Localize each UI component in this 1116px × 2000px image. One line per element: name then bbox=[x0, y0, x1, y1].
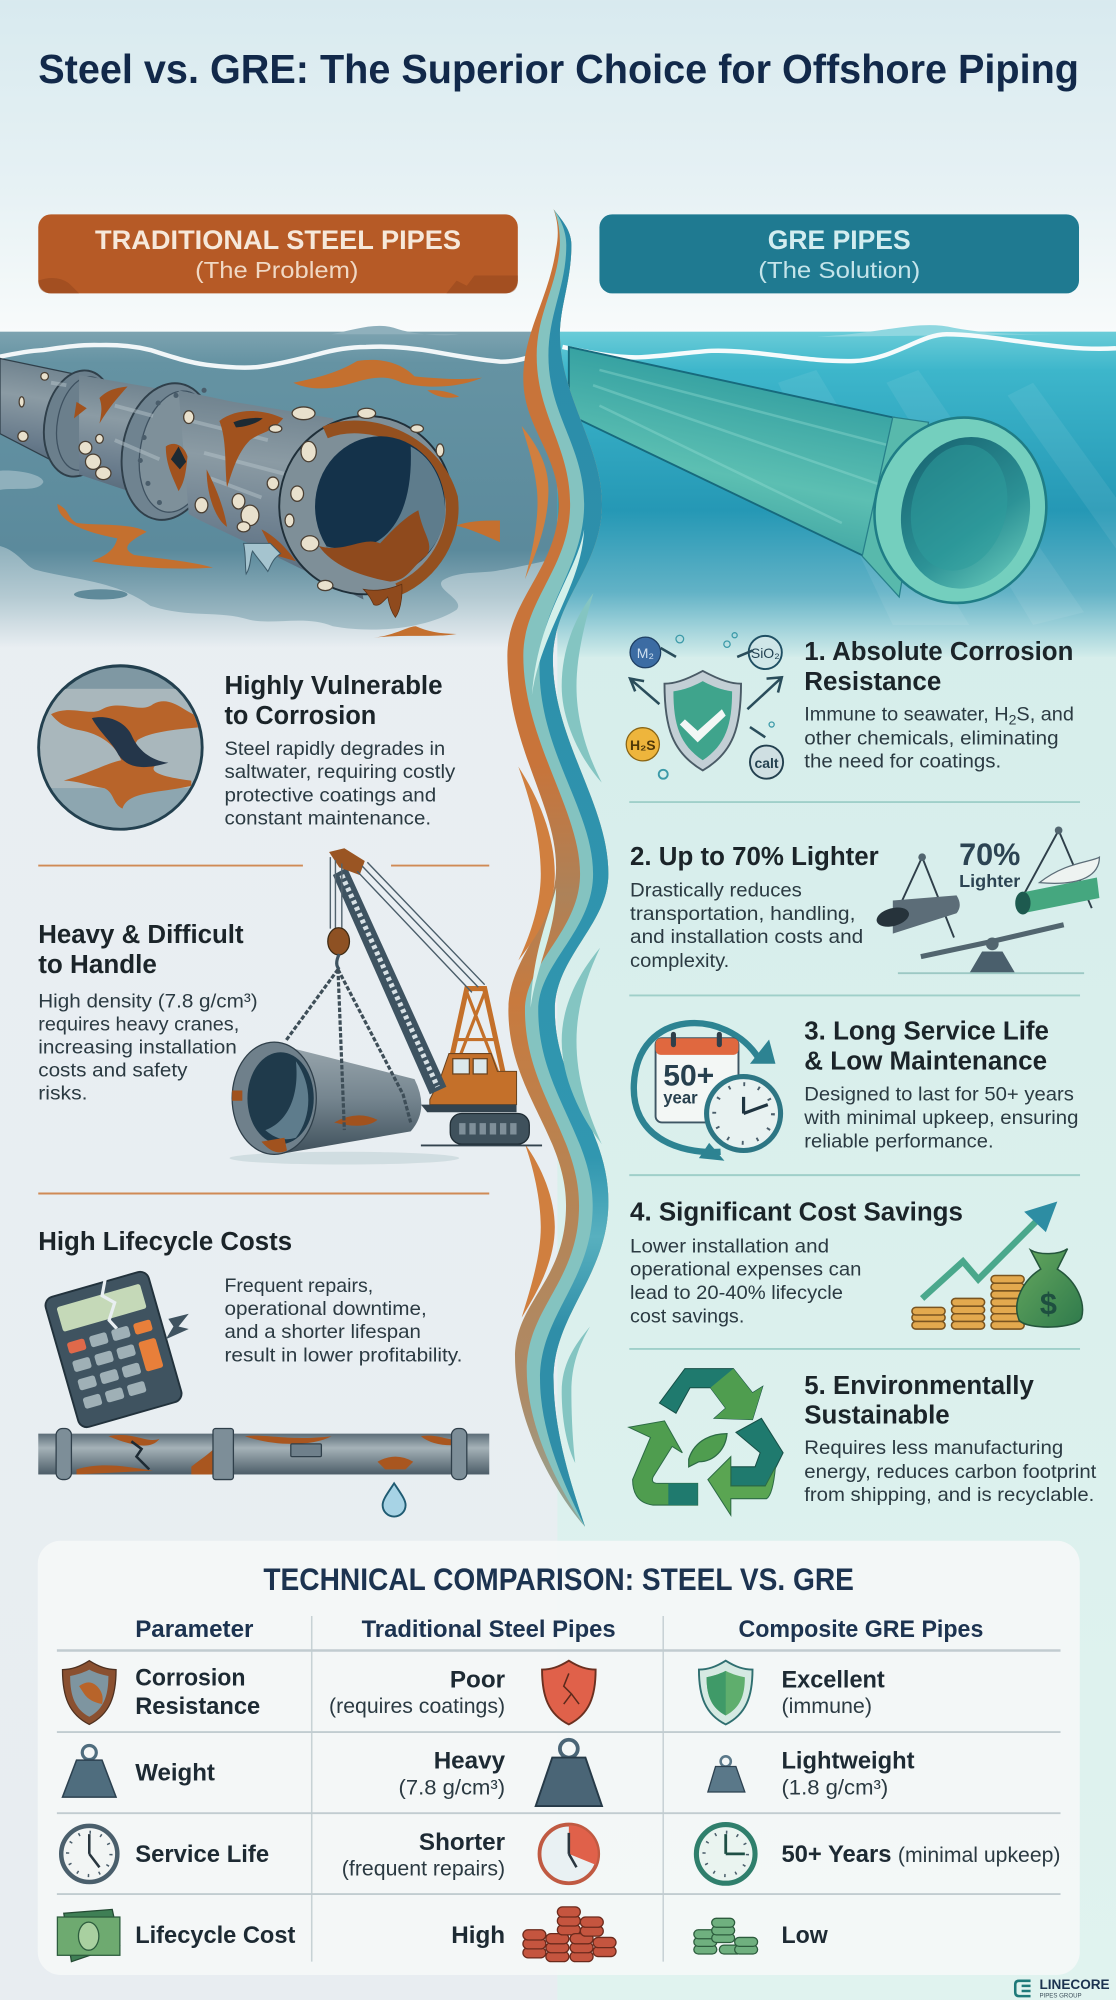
illustration: GRE pipe bbox=[569, 347, 1066, 621]
benefit 1 text: Immune to seawater, H bbox=[804, 704, 1007, 726]
table header: Composite GRE Pipes bbox=[738, 1616, 983, 1643]
row: corrosion resistance: (requires coatings) bbox=[329, 1695, 505, 1718]
benefit 3 text: with minimal upkeep, ensuring bbox=[803, 1107, 1079, 1129]
icon: balance scale: Lighter bbox=[959, 871, 1020, 891]
heading: heavy: to Handle bbox=[38, 951, 157, 979]
icon: heavy weight bbox=[536, 1740, 602, 1806]
barnacles bbox=[18, 372, 444, 591]
text: heavy: risks. bbox=[38, 1083, 87, 1105]
lifting chains bbox=[286, 969, 411, 1130]
text: corrosion: protective coatings and bbox=[224, 785, 436, 807]
icon: shield with molecules: H₂S bbox=[630, 737, 656, 753]
icon: red coin stacks bbox=[523, 1907, 616, 1962]
icon: calendar and clock: 50+ bbox=[663, 1059, 714, 1092]
illustration: crane lifting pipe bbox=[230, 848, 542, 1165]
water drips bbox=[244, 543, 281, 574]
rust patches on pipe bbox=[74, 387, 353, 561]
heading: corrosion: Highly Vulnerable bbox=[224, 672, 443, 700]
row: corrosion resistance: (immune) bbox=[781, 1695, 872, 1718]
benefit 4 text bbox=[630, 1198, 963, 1327]
row: weight: Lightweight bbox=[781, 1748, 914, 1775]
benefit 1 text: S, and bbox=[1016, 704, 1074, 726]
benefit 5 text: Sustainable bbox=[804, 1401, 950, 1429]
icon: recycling arrows with leaf bbox=[629, 1369, 783, 1515]
icon: balance scale: 70% bbox=[959, 836, 1020, 872]
table header: Traditional Steel Pipes bbox=[362, 1616, 616, 1643]
benefit 4 text: cost savings. bbox=[630, 1305, 744, 1327]
benefit 5 text: Requires less manufacturing bbox=[804, 1437, 1063, 1459]
icon: balance scale bbox=[874, 827, 1099, 973]
heading: corrosion: to Corrosion bbox=[224, 702, 376, 730]
lifted pipe bbox=[232, 1042, 421, 1154]
text: corrosion: Steel rapidly degrades in bbox=[224, 738, 445, 760]
row: service life: (frequent repairs) bbox=[342, 1858, 505, 1881]
ribbon: teal side blades bbox=[562, 593, 602, 1463]
benefit 5 text: 5. Environmentally bbox=[804, 1372, 1035, 1400]
icon: broken calculator bbox=[43, 1267, 184, 1429]
row: weight: (1.8 g/cm³) bbox=[781, 1777, 888, 1800]
panel: GRE benefits bbox=[626, 633, 1099, 1515]
text: heavy: requires heavy cranes, bbox=[38, 1013, 239, 1035]
benefit 1 text: the need for coatings. bbox=[804, 751, 1001, 773]
text: corrosion: constant maintenance. bbox=[224, 808, 431, 830]
row: weight bbox=[62, 1740, 914, 1806]
row: corrosion resistance: Corrosion bbox=[135, 1665, 246, 1692]
benefit 5 text: energy, reduces carbon footprint bbox=[804, 1461, 1097, 1483]
text: lifecycle costs: operational downtime, bbox=[224, 1298, 427, 1320]
benefit 2 text: transportation, handling, bbox=[630, 903, 855, 925]
benefit 4 text: Lower installation and bbox=[630, 1235, 829, 1257]
row: service life: Shorter bbox=[419, 1829, 506, 1856]
benefit 4 text: operational expenses can bbox=[630, 1258, 861, 1280]
logo: Linecore Pipes Group: PIPES GROUP bbox=[1039, 1992, 1082, 1999]
ribbon: orange band bbox=[507, 209, 608, 1527]
illustration: corroded steel pipe bbox=[0, 358, 467, 617]
table header: Parameter bbox=[135, 1616, 254, 1643]
central wave ribbon divider bbox=[507, 209, 608, 1527]
ribbon: orange side blades bbox=[518, 426, 555, 1318]
icon: growth arrow, coins and money bag bbox=[912, 1202, 1083, 1329]
flange 1 bbox=[36, 365, 122, 482]
crane boom bbox=[328, 848, 485, 1094]
banner: traditional steel pipes: TRADITIONAL STEEL PIPES bbox=[95, 225, 461, 255]
row: lifecycle cost: Low bbox=[781, 1922, 828, 1949]
text: heavy: increasing installation bbox=[38, 1037, 237, 1059]
table header bbox=[135, 1616, 983, 1643]
text: lifecycle costs: and a shorter lifespan bbox=[224, 1321, 421, 1343]
banner: traditional steel pipes: (The Problem) bbox=[195, 257, 358, 283]
water: clean side bbox=[557, 325, 1116, 657]
icon: calendar and clock bbox=[634, 1023, 781, 1161]
benefit 5 text bbox=[804, 1372, 1097, 1506]
panel: technical comparison table bbox=[38, 1541, 1080, 1975]
water: corroded side bbox=[0, 326, 557, 648]
icon: shield with molecules bbox=[626, 633, 783, 779]
benefit 3 text: reliable performance. bbox=[804, 1130, 994, 1152]
text: lifecycle costs bbox=[224, 1275, 462, 1366]
icon: clock bbox=[61, 1826, 117, 1882]
row: service life bbox=[61, 1825, 1061, 1883]
benefit 3 text: Designed to last for 50+ years bbox=[804, 1083, 1074, 1105]
banner: traditional steel pipes bbox=[38, 214, 518, 293]
banner: GRE pipes bbox=[599, 214, 1079, 293]
icon: shield with molecules: M₂ bbox=[637, 645, 654, 661]
row: service life: 50+ Years bbox=[781, 1841, 892, 1868]
icon: banknotes bbox=[57, 1909, 120, 1962]
panel: steel problems bbox=[38, 666, 542, 1517]
benefit 1 text: other chemicals, eliminating bbox=[804, 728, 1059, 750]
table title: TECHNICAL COMPARISON: STEEL VS. GRE bbox=[263, 1561, 854, 1597]
row: weight: Heavy bbox=[434, 1748, 506, 1775]
crane body bbox=[421, 989, 542, 1145]
logo: Linecore Pipes Group: LINECORE bbox=[1039, 1977, 1110, 1992]
row: service life: (minimal upkeep) bbox=[898, 1844, 1061, 1867]
pipe opening bbox=[265, 402, 467, 617]
row: lifecycle cost: High bbox=[451, 1922, 505, 1949]
icon: calendar and clock: year bbox=[663, 1087, 698, 1107]
icon: red clock bbox=[540, 1825, 598, 1883]
icon: corrosion close-up bbox=[38, 666, 204, 832]
text: lifecycle costs: result in lower profitability. bbox=[224, 1344, 462, 1366]
heading: lifecycle costs: High Lifecycle Costs bbox=[38, 1228, 292, 1256]
heading: heavy bbox=[38, 921, 244, 979]
benefit 1 text: 2 bbox=[1009, 712, 1017, 728]
benefit 4 text: 4. Significant Cost Savings bbox=[630, 1198, 963, 1226]
row: corrosion resistance bbox=[62, 1661, 885, 1724]
benefit 1 text: Resistance bbox=[804, 668, 941, 696]
icon: light weight bbox=[708, 1756, 745, 1792]
benefit 4 text: lead to 20-40% lifecycle bbox=[630, 1282, 843, 1304]
text: lifecycle costs: Frequent repairs, bbox=[224, 1275, 373, 1297]
icon: shield with molecules: SiO₂ bbox=[751, 645, 780, 661]
benefit 1 text bbox=[804, 638, 1074, 773]
benefit 2 text: and installation costs and bbox=[630, 926, 863, 948]
text: corrosion bbox=[224, 738, 455, 830]
benefit 2 text: 2. Up to 70% Lighter bbox=[630, 843, 879, 871]
row: lifecycle cost bbox=[57, 1907, 828, 1962]
illustration: leaking corroded pipe bbox=[38, 1429, 489, 1517]
benefit 3 text bbox=[803, 1018, 1079, 1152]
pipe collar bbox=[862, 417, 929, 597]
text: heavy: costs and safety bbox=[38, 1060, 188, 1082]
benefit 2 text: complexity. bbox=[630, 950, 729, 972]
benefit 5 text: from shipping, and is recyclable. bbox=[804, 1484, 1094, 1506]
heading: heavy: Heavy & Difficult bbox=[38, 921, 244, 949]
icon: cracked red shield bbox=[542, 1661, 596, 1724]
benefit 2 text bbox=[630, 843, 879, 972]
flange 2 bbox=[111, 376, 226, 527]
title: Steel vs. GRE: The Superior Choice for Offshore Piping bbox=[38, 46, 1079, 92]
icon: green shield bbox=[699, 1661, 753, 1724]
benefit 3 text: & Low Maintenance bbox=[804, 1048, 1047, 1076]
ribbon: light teal band bbox=[523, 209, 608, 1527]
text: heavy bbox=[38, 990, 258, 1105]
row: weight: Weight bbox=[135, 1760, 215, 1787]
row: lifecycle cost: Lifecycle Cost bbox=[135, 1922, 295, 1949]
icon: growth arrow, coins and money bag: $ bbox=[1040, 1287, 1057, 1321]
ribbon: dark teal band bbox=[538, 209, 608, 1527]
pipe opening bbox=[855, 399, 1066, 621]
row: corrosion resistance: Poor bbox=[450, 1666, 506, 1693]
benefit 3 text: 3. Long Service Life bbox=[804, 1018, 1049, 1046]
benefit 2 text: Drastically reduces bbox=[630, 880, 802, 902]
logo: Linecore Pipes Group bbox=[1015, 1977, 1110, 1999]
ribbon: highlights bbox=[531, 529, 584, 1008]
benefit 1 text: 1. Absolute Corrosion bbox=[804, 638, 1073, 666]
icon: shield with molecules: calt bbox=[754, 755, 779, 771]
text: corrosion: saltwater, requiring costly bbox=[224, 761, 455, 783]
icon: broken shards bbox=[166, 1314, 189, 1339]
text: heavy: High density (7.8 g/cm³) bbox=[38, 990, 258, 1012]
banner: GRE pipes: (The Solution) bbox=[758, 257, 920, 283]
heading: corrosion bbox=[224, 672, 443, 730]
row: corrosion resistance: Excellent bbox=[781, 1666, 885, 1693]
row: service life: Service Life bbox=[135, 1841, 269, 1868]
banner: GRE pipes: GRE PIPES bbox=[768, 225, 911, 255]
icon: green coin stacks bbox=[694, 1918, 758, 1954]
icon: green clock bbox=[696, 1825, 755, 1883]
icon: weight bbox=[62, 1745, 116, 1797]
icon: rusted shield bbox=[62, 1661, 116, 1724]
row: corrosion resistance: Resistance bbox=[135, 1693, 260, 1720]
row: weight: (7.8 g/cm³) bbox=[399, 1777, 505, 1800]
